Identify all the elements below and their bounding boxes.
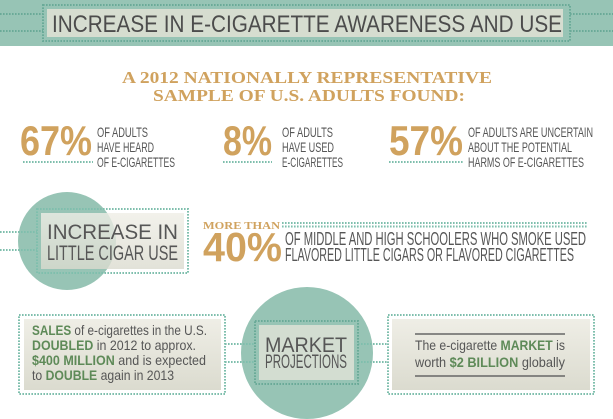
panel: market projections heading	[255, 321, 358, 384]
stat: 40% schoolers: MORE THAN	[203, 220, 280, 232]
panel: sales: SALES of e-cigarettes in the U.S.	[32, 322, 207, 338]
stat: 8%	[223, 117, 343, 170]
stat: 40% schoolers	[203, 220, 587, 270]
stat: 8%: OF ADULTS	[282, 124, 333, 140]
stat: 67%: HAVE HEARD	[97, 139, 154, 155]
stat: 57%	[389, 117, 593, 170]
panel: little cigar heading	[0, 209, 188, 273]
panel: little cigar heading: INCREASE IN	[47, 221, 178, 244]
stat: 40% schoolers: 40%	[203, 224, 282, 270]
stat: 67%: OF E-CIGARETTES	[97, 154, 175, 170]
panel: sales	[19, 315, 225, 394]
subtitle	[122, 68, 492, 105]
header band	[0, 0, 613, 46]
panel: sales: to DOUBLE again in 2013	[32, 367, 174, 383]
stat: 67%	[20, 117, 175, 170]
panel: global market: The e-cigarette MARKET is	[415, 337, 565, 353]
panel: sales: DOUBLED in 2012 to approx.	[32, 337, 196, 353]
subtitle: SAMPLE OF U.S. ADULTS FOUND:	[153, 86, 465, 105]
stat: 8%: 8%	[223, 117, 272, 164]
subtitle: A 2012 NATIONALLY REPRESENTATIVE	[122, 68, 492, 87]
stat: 8%: E-CIGARETTES	[282, 154, 343, 170]
panel: market projections heading: PROJECTIONS	[265, 352, 347, 373]
stat: 67%: OF ADULTS	[97, 124, 148, 140]
stat: 67%: 67%	[20, 117, 92, 164]
stat: 8%: HAVE USED	[282, 139, 334, 155]
circle: market	[241, 287, 373, 419]
stat: 57%: 57%	[389, 117, 463, 164]
circle: little cigar	[18, 192, 116, 290]
connectors	[225, 344, 388, 362]
panel: little cigar heading: LITTLE CIGAR USE	[47, 242, 178, 265]
panel: global market	[388, 315, 594, 394]
panel: global market: worth $2 BILLION globally	[414, 354, 565, 370]
panel: sales: $400 MILLION and is expected	[32, 352, 206, 368]
panel: market projections heading: MARKET	[265, 334, 347, 357]
